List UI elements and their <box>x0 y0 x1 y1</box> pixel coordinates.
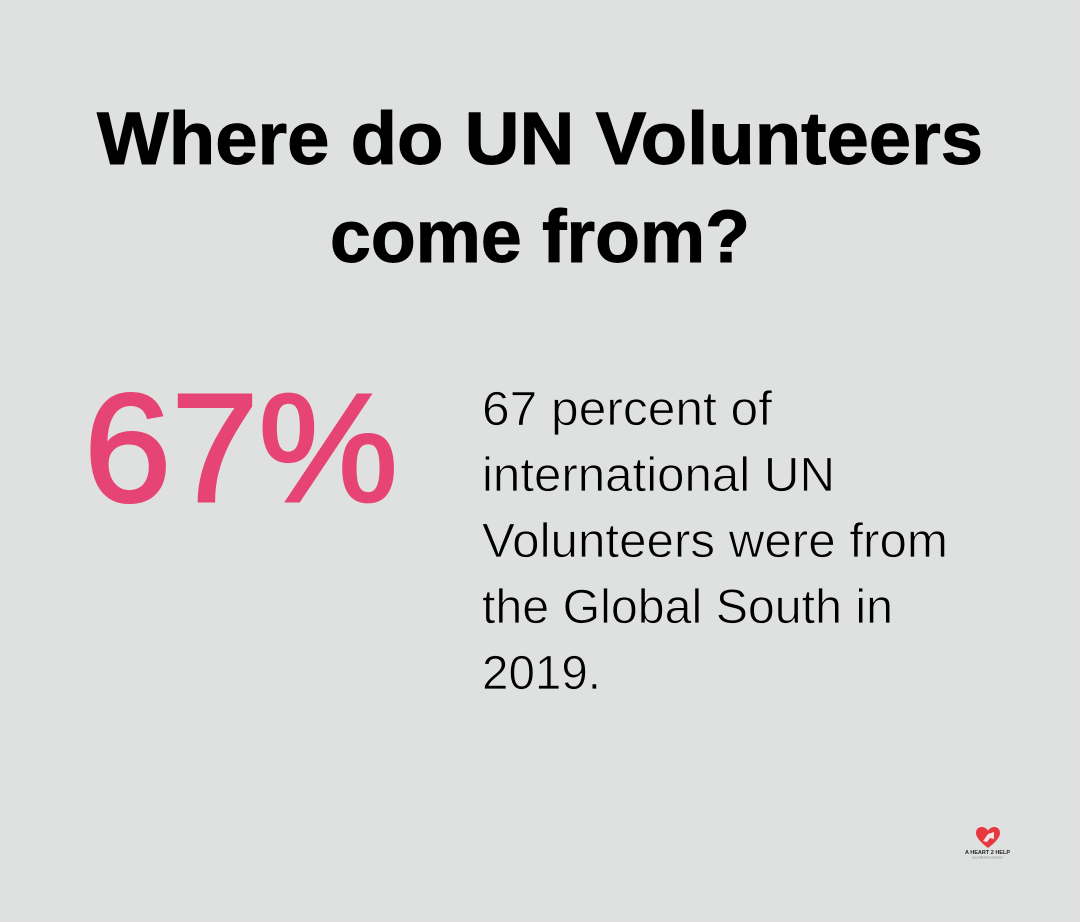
description text: international UN <box>482 449 835 502</box>
icon: heart <box>976 827 1000 848</box>
description text <box>482 383 948 700</box>
logo: A Heart 2 Help <box>965 827 1011 860</box>
title: Where do UN Volunteers <box>97 97 983 180</box>
description text: the Global South in <box>482 581 893 634</box>
logo name: A HEART 2 HELP <box>965 850 1011 856</box>
icon: hands in heart <box>983 832 994 842</box>
title: come from? <box>330 195 750 278</box>
description text: Volunteers were from <box>482 515 948 568</box>
title <box>97 97 983 278</box>
logo tagline: VOLUNTEER AND GIVE BACK <box>972 856 1003 860</box>
big statistic: 67%: 67% <box>84 362 398 534</box>
description text: 2019. <box>482 647 601 700</box>
description text: 67 percent of <box>482 383 773 436</box>
